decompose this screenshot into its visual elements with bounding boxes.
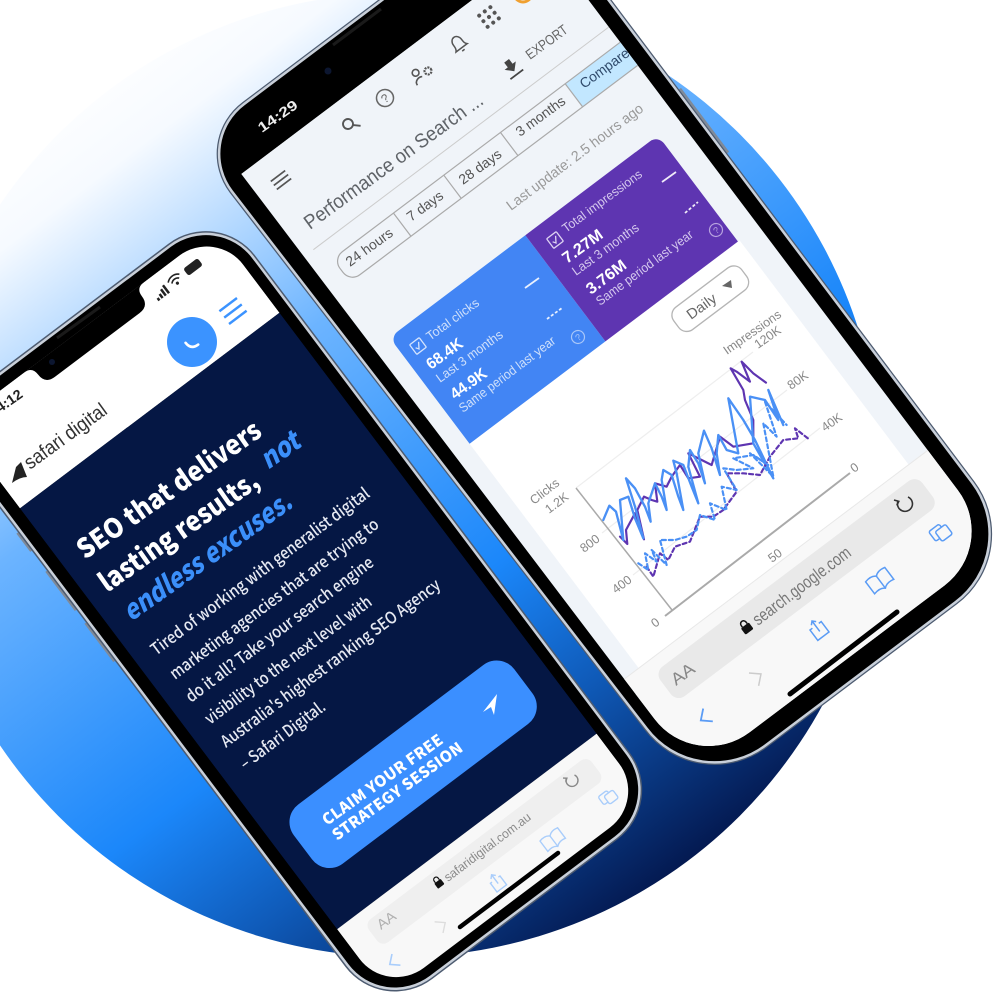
icon: menu: [219, 298, 247, 324]
panel: total impressions: Same period last year: [593, 226, 696, 308]
text: description paragraph: Australia's highest ranking SEO Agency: [215, 572, 445, 752]
icon: search: [342, 118, 361, 130]
text: description paragraph: visibility to the next level with: [199, 589, 376, 729]
logo: safari digital: safari digital: [20, 399, 111, 474]
chart: clicks and impressions: 0: [648, 615, 662, 630]
tabs: date range: 24 hours: [342, 224, 396, 269]
status bar: right phone: 14:29: [255, 96, 301, 135]
dropdown: daily: [671, 265, 750, 332]
panel: total impressions: ?: [711, 225, 721, 236]
heading: SEO that delivers lasting results: SEO that delivers: [67, 410, 268, 567]
chart: clicks and impressions: Impressions: [721, 307, 784, 357]
icon: users settings: [411, 66, 432, 86]
heading: Performance on Search: Performance on Search ...: [300, 89, 488, 234]
chart: clicks and impressions: Clicks: [527, 476, 562, 507]
toolbar icons: right phone: [696, 521, 953, 727]
heading: SEO that delivers lasting results: [77, 424, 302, 619]
dropdown: daily: Daily: [684, 290, 721, 323]
chart: clicks and impressions: 400: [609, 573, 634, 596]
toolbar icons: left phone: [386, 787, 619, 970]
tabs: date range: 3 months: [512, 93, 568, 139]
icon: help: [376, 88, 394, 108]
phone: Google Search Console performance: [194, 0, 1000, 801]
phone: Safari Digital website: [0, 206, 667, 1000]
tabs: date range: 7 days: [403, 187, 446, 224]
url bar: search.google.com: search.google.com: [748, 542, 855, 629]
panel: total impressions: 7.27M: [559, 226, 607, 267]
text: description paragraph: marketing agencies that are trying to: [164, 511, 383, 684]
status bar: right phone: [255, 9, 381, 135]
panel: total impressions: 3.76M: [583, 257, 630, 298]
chart: clicks and impressions: 800: [577, 532, 602, 555]
icon: call button: [167, 317, 217, 367]
icon: bell: [451, 36, 469, 54]
screen: website: [0, 228, 647, 996]
url bar: search.google.com: [655, 475, 939, 702]
url bar: safaridigital.com.au: [364, 756, 605, 947]
home indicator: right phone: [790, 612, 897, 694]
panel: total impressions: Total impressions: [559, 167, 645, 235]
icon: download: [504, 59, 524, 80]
tabs: date range: Compare: [576, 45, 633, 91]
chart: clicks and impressions: 120K: [752, 323, 784, 351]
tabs: date range: [313, 26, 639, 288]
icon: apps grid: [476, 4, 502, 30]
panel: total clicks: [390, 235, 605, 444]
phone body: left phone frame: [0, 206, 667, 1000]
chart: clicks and impressions: [527, 307, 861, 630]
url bar: search.google.com: AA: [667, 659, 699, 689]
icon: wifi: [167, 273, 180, 285]
url bar: safaridigital.com.au: AA: [373, 907, 400, 932]
button: claim your free strategy session: [289, 660, 537, 868]
chart: clicks and impressions: 50: [765, 546, 785, 565]
panel: total clicks: Total clicks: [424, 296, 482, 343]
button: claim your free strategy session: STRATEGY SESSION: [327, 737, 467, 845]
chart: clicks and impressions: 80K: [785, 368, 811, 392]
text: description paragraph: Tired of working with generalist digital: [145, 481, 374, 660]
panel: total clicks: 44.9K: [447, 365, 491, 403]
screen: dashboard: [240, 0, 1000, 777]
heading: SEO that delivers lasting results: lasting results,: [89, 460, 266, 600]
icon: battery: [184, 259, 202, 275]
icon: help: ?: [378, 91, 392, 106]
panel: total impressions: Last 3 months: [569, 220, 642, 278]
text: description paragraph: do it all? Take your search engine: [180, 550, 378, 707]
text: description paragraph: [145, 481, 445, 774]
button: claim your free strategy session: CLAIM YOUR FREE: [317, 729, 447, 830]
chart: clicks and impressions: 40K: [819, 410, 845, 434]
text: export: EXPORT: [522, 21, 571, 62]
text: last update: Last update: 2.5 hours ago: [504, 101, 647, 214]
heading: SEO that delivers lasting results: not: [250, 419, 309, 477]
notch: [24, 282, 145, 380]
camera and speaker: left phone: [49, 307, 100, 365]
icon: hamburger menu: [271, 171, 291, 189]
panel: total clicks: Last 3 months: [433, 327, 506, 385]
icon: signal: [156, 284, 170, 302]
chart: clicks and impressions: 0: [848, 460, 861, 475]
text: description paragraph: – Safari Digital.: [234, 694, 330, 774]
panel: total clicks: Same period last year: [456, 333, 559, 415]
url bar: safaridigital.com.au: safaridigital.com.au: [441, 810, 534, 884]
panel: total impressions: [525, 135, 738, 341]
chart: clicks and impressions: 1.2K: [542, 489, 572, 516]
panel: total clicks: ?: [573, 332, 583, 343]
icon: avatar: [514, 0, 532, 2]
home indicator: left phone: [460, 853, 558, 927]
panel: total clicks: 68.4K: [423, 335, 467, 373]
phone body: right phone frame: [194, 0, 1000, 801]
tabs: date range: 28 days: [455, 146, 504, 187]
heading: SEO that delivers lasting results: endless excuses.: [113, 481, 299, 629]
